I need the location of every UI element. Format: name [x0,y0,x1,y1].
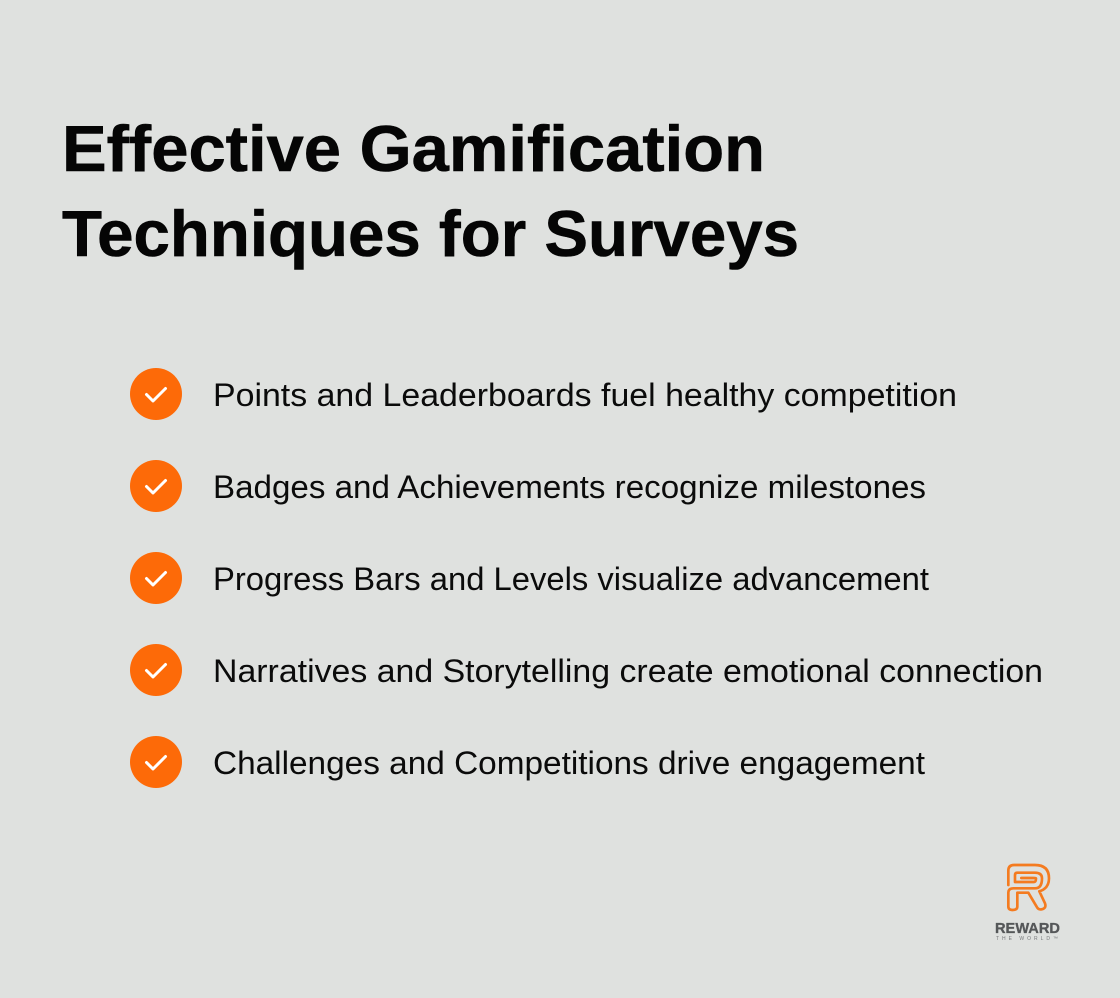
logo wordmark: REWARD [995,921,1060,937]
title: Effective Gamification [62,112,765,185]
title: Techniques for Surveys [62,197,799,270]
logo: Reward the World [995,865,1060,942]
item 2: badges and achievements [130,460,926,512]
item 5: challenges and competitions: Challenges and Competitions drive engagement [213,745,925,781]
item 2: badges and achievements: Badges and Achievements recognize milestones [213,469,926,505]
item 1: points and leaderboards: Points and Leaderboards fuel healthy competition [213,377,957,413]
item 4: narratives and storytelling [130,644,1043,696]
title [62,112,799,270]
item 3: progress bars and levels: Progress Bars and Levels visualize advancement [213,561,929,597]
item 5: challenges and competitions [130,736,925,788]
item 1: points and leaderboards [130,368,957,420]
checklist [130,368,1043,788]
item 3: progress bars and levels [130,552,929,604]
logo tagline: THE WORLD™ [996,936,1058,942]
item 4: narratives and storytelling: Narratives and Storytelling create emotional connection [213,653,1043,689]
icon: R monogram [1008,865,1049,910]
